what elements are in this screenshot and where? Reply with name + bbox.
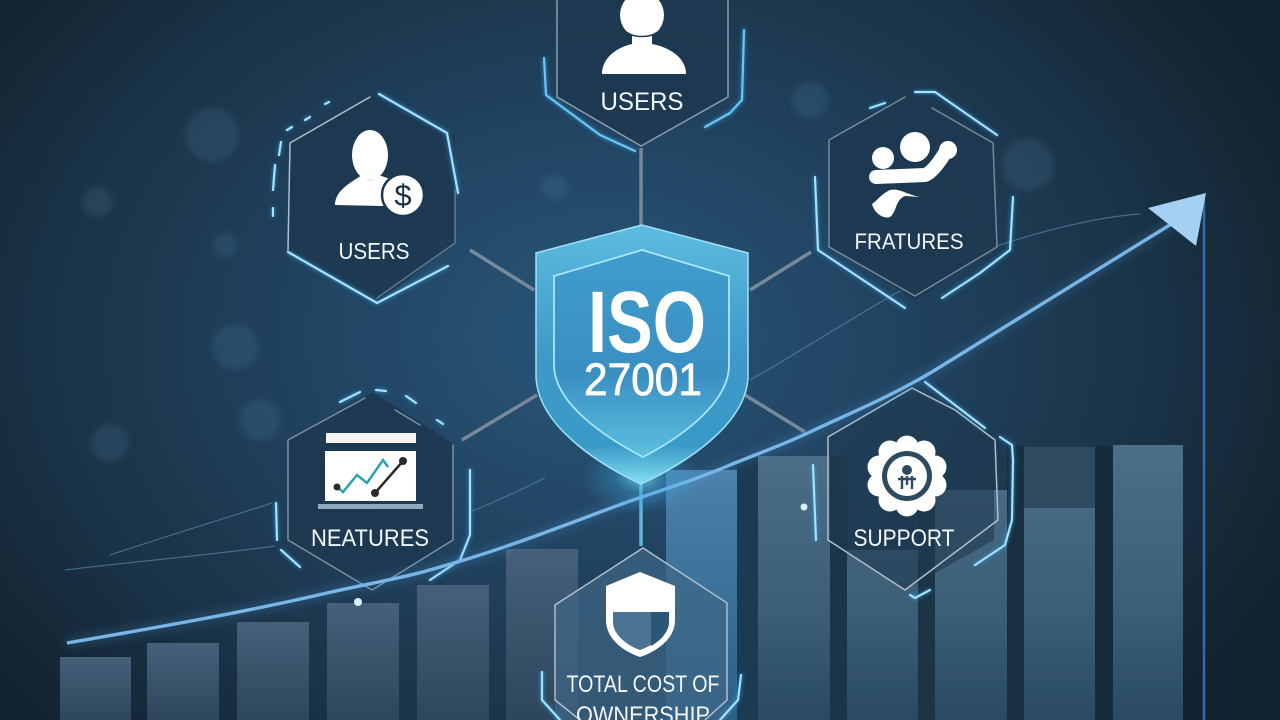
shield: ISO 27001 <box>536 225 748 484</box>
bar chart <box>60 445 1183 720</box>
subheading: 27001: 27001 <box>584 354 702 405</box>
label: users top: USERS <box>600 88 684 116</box>
hexagon: users left <box>273 94 458 303</box>
label: support: SUPPORT <box>854 525 955 552</box>
bokeh lights <box>83 82 1054 462</box>
label: features right: FRATURES <box>854 229 964 254</box>
icon: user with dollar coin: $ <box>394 178 412 213</box>
icon: shield <box>606 572 675 657</box>
icon: gear <box>868 436 946 516</box>
heading: ISO: ISO <box>588 274 706 371</box>
vertical axis <box>1203 195 1205 720</box>
growth arrow <box>67 193 1206 643</box>
hexagon: features left <box>276 390 470 606</box>
glow under shield <box>581 442 701 514</box>
icon: people and hand <box>872 132 957 217</box>
hexagon: support <box>800 382 1013 598</box>
icon: user <box>602 0 686 74</box>
connector lines <box>462 148 811 546</box>
faint trend lines <box>65 214 1140 570</box>
icon: user with dollar coin <box>335 130 424 216</box>
hexagon: features right <box>815 92 1013 308</box>
label: total cost of ownership: TOTAL COST OF <box>566 671 720 698</box>
label: features left: NEATURES <box>311 525 429 552</box>
icon: laptop with chart <box>318 433 423 509</box>
label: users left: USERS <box>338 238 410 264</box>
hexagon: users top <box>544 0 744 151</box>
hexagon: total cost of ownership <box>542 547 741 720</box>
